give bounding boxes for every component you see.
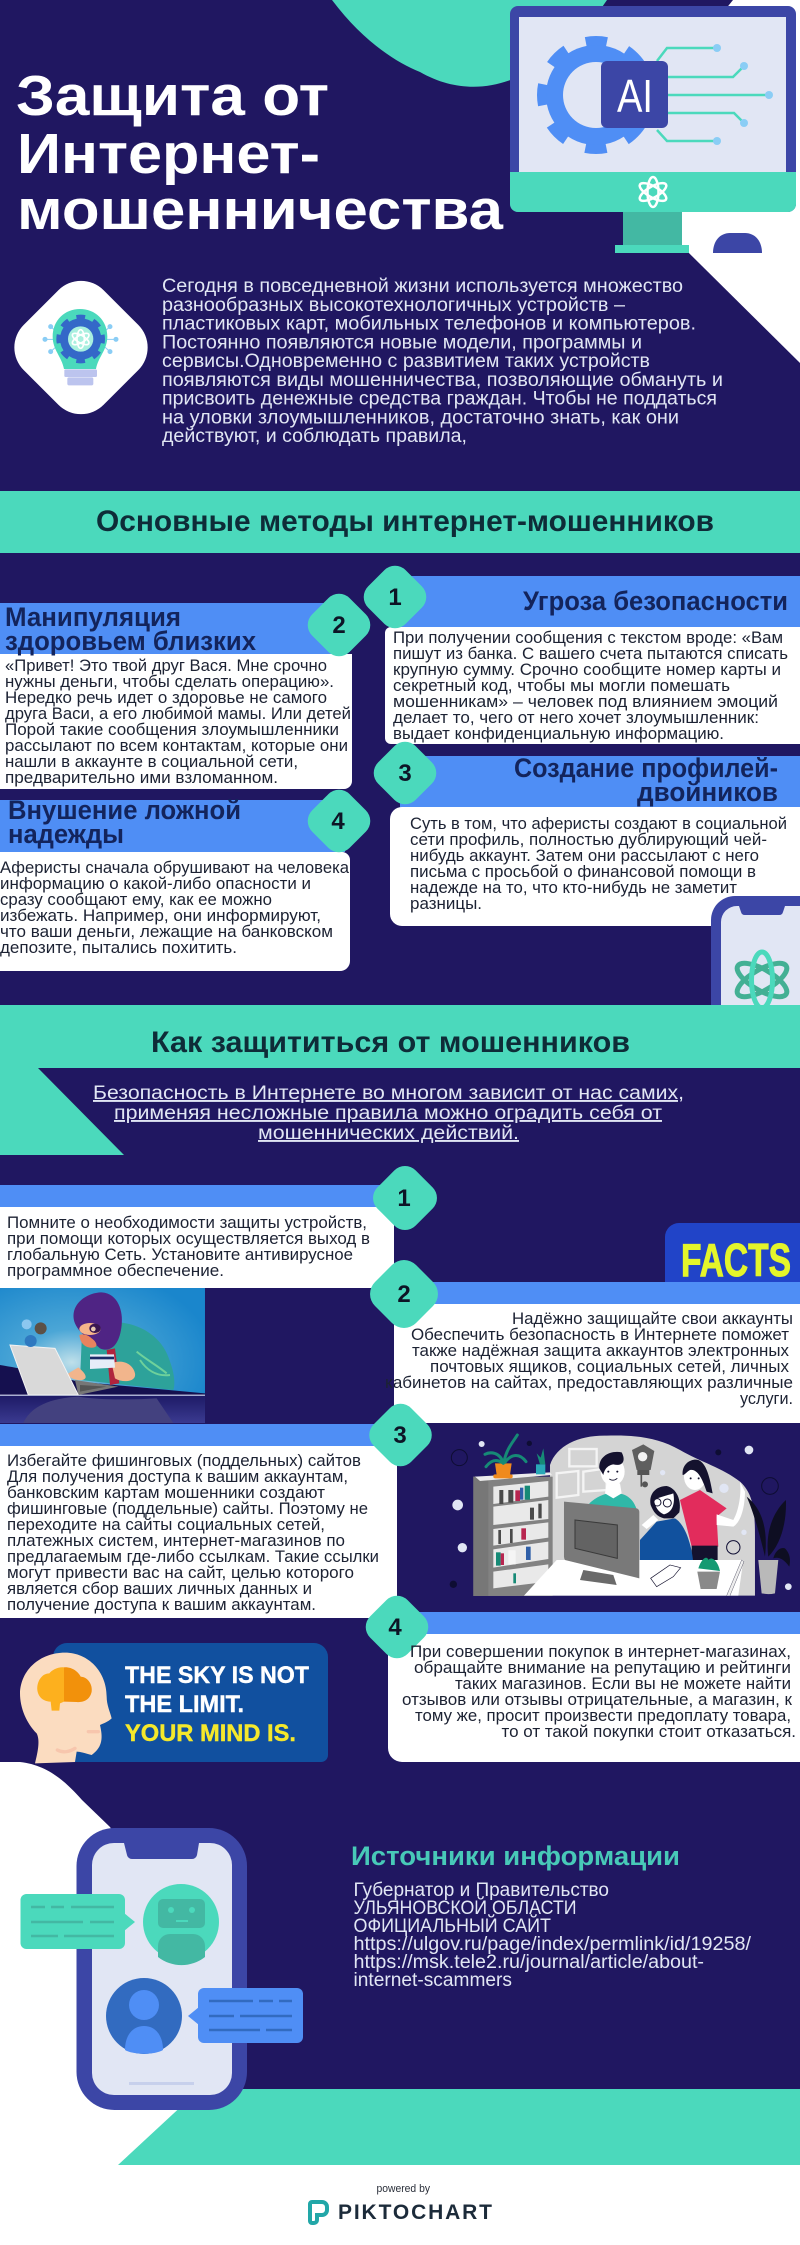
panel: tip 3: Для получения доступа к вашим аккаунтам,	[7, 1468, 348, 1486]
sources text	[354, 1880, 752, 1991]
panel: method 1: крупную сумму. Срочно сообщите номер карты и	[393, 661, 781, 679]
sources text: https://msk.tele2.ru/journal/article/about-	[354, 1952, 704, 1973]
panel: tip 3: платежных систем, интернет-магазинов по	[7, 1532, 345, 1550]
intro text: пластиковых карт, мобильных телефонов и компьютеров.	[162, 314, 696, 334]
heading band: methods	[0, 491, 800, 553]
panel: method 2: Манипуляция	[5, 602, 181, 632]
panel: tip 2: Обеспечить безопасность в Интернете поможет	[411, 1326, 789, 1344]
panel: tip 3: 3	[393, 1422, 407, 1449]
panel: method 4: Внушение ложной	[8, 795, 241, 825]
panel: method 3: надежде на то, что кто-нибудь не заметит	[410, 879, 737, 897]
panel: tip 3: является сбор ваших личных данных и	[7, 1580, 312, 1598]
subtitle text: мошеннических действий.	[258, 1123, 519, 1144]
panel: tip 3: переходите на сайты социальных сетей,	[7, 1516, 325, 1534]
panel: method 1: мошенникам» – человек под влиянием эмоций	[393, 693, 778, 711]
panel: method 4: сразу сообщают ему, как ее можно	[0, 891, 272, 909]
sources text: internet-scammers	[354, 1970, 512, 1991]
panel: tip 1: 1	[397, 1185, 411, 1212]
panel: tip 2: почтовых ящиков, социальных сетей, личных	[430, 1358, 790, 1376]
intro text: Постоянно появляются новые модели, программы и	[162, 332, 642, 353]
intro text: сервисы.Одновременно с развитием таких устройств	[162, 351, 650, 372]
panel: method 2: рассылают по всем контактам, которые они	[5, 737, 348, 755]
panel: tip 3	[0, 1398, 438, 1618]
panel: tip 3: получение доступа к вашим аккаунтам.	[7, 1596, 316, 1614]
panel: method 3: сети профиль, полностью дублирующий чей-	[410, 831, 767, 849]
panel: method 2: здоровьем близких	[5, 626, 256, 656]
panel: method 3: Создание профилей-	[514, 753, 778, 783]
panel: method 1: пишут из банка. С вашего счета пытаются списать	[393, 645, 788, 663]
panel: tip 4: тому же, просит произвести предоплату товара,	[415, 1707, 791, 1725]
banner: the sky is not the limit: THE SKY IS NOT	[125, 1662, 309, 1689]
panel: method 4: что ваши деньги, лежащие на банковском	[0, 923, 333, 941]
footer logo: powered by Piktochart: PIKTOCHART	[338, 2201, 492, 2224]
panel: tip 2: также надёжная защита аккаунтов электронных	[412, 1342, 790, 1360]
heading band: protection: Как защититься от мошенников	[151, 1026, 630, 1059]
panel: method 2: Порой такие сообщения злоумышленники	[5, 721, 339, 739]
panel: method 1: секретный код, чтобы мы могли помешать	[393, 677, 730, 695]
intro text: присвоить денежные средства граждан. Чтобы не поддаться	[162, 388, 717, 410]
panel: tip 2	[363, 1253, 800, 1423]
panel: method 3: нибудь аккаунт. Затем они рассылают с него	[410, 847, 759, 865]
panel: tip 2: услуги.	[740, 1390, 793, 1408]
panel: method 2: нашли в аккаунте в социальной сети,	[5, 753, 298, 771]
title	[16, 64, 504, 242]
sources text: ОФИЦИАЛЬНЫЙ САЙТ	[354, 1915, 551, 1937]
panel: method 1: Угроза безопасности	[523, 586, 788, 616]
panel: method 2: «Привет! Это твой друг Вася. Мне срочно	[5, 657, 327, 675]
panel: tip 3: фишинговые (поддельные) сайты. Поэтому не	[7, 1500, 368, 1518]
sources text: Губернатор и Правительство	[354, 1880, 609, 1901]
panel: method 1: выдает конфиденциальную информацию.	[393, 725, 724, 743]
panel: method 1	[358, 560, 800, 744]
subtitle text: Безопасность в Интернете во многом зависит от нас самих,	[93, 1083, 684, 1104]
white and teal footer shapes	[0, 1762, 800, 2165]
banner: the sky is not the limit	[20, 1643, 328, 1763]
panel: tip 1: программное обеспечение.	[7, 1262, 224, 1280]
panel: tip 1	[0, 1160, 443, 1288]
footer logo: powered by Piktochart: powered by	[376, 2183, 430, 2195]
panel: method 3: разницы.	[410, 895, 482, 913]
sources text: https://ulgov.ru/page/index/permlink/id/19258/	[354, 1934, 752, 1955]
panel: method 2: нужны деньги, чтобы сделать операцию».	[5, 673, 334, 691]
subtitle text: применяя несложные правила можно оградить себя от	[114, 1103, 662, 1124]
heading band: methods: Основные методы интернет-мошенников	[96, 505, 714, 538]
panel: method 4: надежды	[8, 819, 124, 849]
panel: tip 4	[360, 1590, 800, 1762]
panel: tip 1: при помощи которых осуществляется выход в	[7, 1230, 370, 1248]
panel: method 1: 1	[388, 584, 402, 611]
panel: tip 1: Помните о необходимости защиты устройств,	[7, 1214, 367, 1232]
panel: method 2: 2	[332, 612, 346, 639]
intro text: разнообразных высокотехнологичных устройств –	[162, 295, 625, 316]
panel: tip 1: глобальную Сеть. Установите антивирусное	[7, 1246, 353, 1264]
panel: tip 3: банковским картам мошенники создают	[7, 1484, 325, 1502]
panel: method 4: информацию о какой-либо опасности и	[0, 875, 311, 893]
icon: AI monitor: AI	[617, 70, 653, 122]
panel: tip 4: то от такой покупки стоит отказаться.	[502, 1723, 796, 1741]
heading band: protection	[0, 1005, 800, 1155]
panel: tip 3: предлагаемым где-либо ссылкам. Такие ссылки	[7, 1548, 379, 1566]
title: Интернет-	[17, 122, 320, 186]
image: scammer at laptop	[0, 1288, 205, 1423]
panel: method 4: избежать. Например, они информируют,	[0, 907, 321, 925]
illustration: family at computer	[450, 1435, 792, 1596]
panel: method 2: Нередко речь идет о здоровье не самого	[5, 689, 327, 707]
footer logo: powered by Piktochart	[310, 2183, 492, 2224]
intro text: Сегодня в повседневной жизни используется множество	[162, 276, 683, 297]
panel: method 3: Суть в том, что аферисты создают в социальной	[410, 815, 787, 833]
panel: tip 3: Избегайте фишинговых (поддельных) сайтов	[7, 1452, 361, 1470]
panel: method 4: Аферисты сначала обрушивают на человека	[0, 859, 350, 877]
panel: tip 4: 4	[388, 1614, 402, 1641]
icon: phone with flower	[711, 896, 800, 1008]
panel: method 1: делает то, чего от него хочет злоумышленник:	[393, 709, 759, 727]
panel: method 1: При получении сообщения с текстом вроде: «Вам	[393, 629, 783, 647]
icon: AI monitor	[510, 6, 796, 253]
panel: method 3: письма с просьбой о финансовой помощи в	[410, 863, 756, 881]
panel: tip 2: 2	[397, 1281, 411, 1308]
panel: tip 4: отзывов или отзывы отрицательные, а магазин, к	[402, 1691, 793, 1709]
panel: method 4	[0, 784, 376, 971]
panel: method 4: 4	[331, 808, 345, 835]
panel: method 4: депозите, пытались похитить.	[0, 939, 237, 957]
banner: the sky is not the limit: YOUR MIND IS.	[125, 1720, 296, 1747]
panel: method 2: предварительно ими взломанном.	[5, 769, 278, 787]
panel: tip 4: таких магазинов. Если вы не можете найти	[455, 1675, 791, 1693]
panel: tip 4: обращайте внимание на репутацию и рейтинги	[414, 1659, 791, 1677]
intro text	[162, 276, 723, 447]
subtitle text	[93, 1083, 684, 1144]
panel: tip 2: Надёжно защищайте свои аккаунты	[512, 1310, 793, 1328]
panel: tip 4: При совершении покупок в интернет-магазинах,	[410, 1643, 791, 1661]
icon: light bulb in white diamond	[1, 268, 161, 427]
intro text: действуют, и соблюдать правила,	[162, 426, 467, 447]
title: мошенничества	[17, 178, 504, 242]
panel: method 3: двойников	[637, 777, 778, 807]
icon: chat phone	[20, 1828, 303, 2110]
banner: the sky is not the limit: THE LIMIT.	[125, 1691, 244, 1718]
panel: method 2: друга Васи, а его любимой мамы. Или детей	[5, 705, 351, 723]
title: Защита от	[16, 64, 329, 128]
panel: tip 2: кабинетов на сайтах, предоставляющих различные	[385, 1374, 793, 1392]
panel: method 3: 3	[398, 760, 412, 787]
sources heading: Источники информации	[351, 1841, 680, 1871]
panel: tip 3: могут привести вас на сайт, целью которого	[7, 1564, 354, 1582]
intro text: на уловки злоумышленников, достаточно знать, как они	[162, 407, 679, 428]
panel: method 2	[0, 588, 376, 789]
intro text: появляются виды мошенничества, позволяющие обмануть и	[162, 370, 723, 391]
panel: method 3	[368, 736, 800, 926]
sources text: УЛЬЯНОВСКОЙ ОБЛАСТИ	[354, 1897, 576, 1919]
